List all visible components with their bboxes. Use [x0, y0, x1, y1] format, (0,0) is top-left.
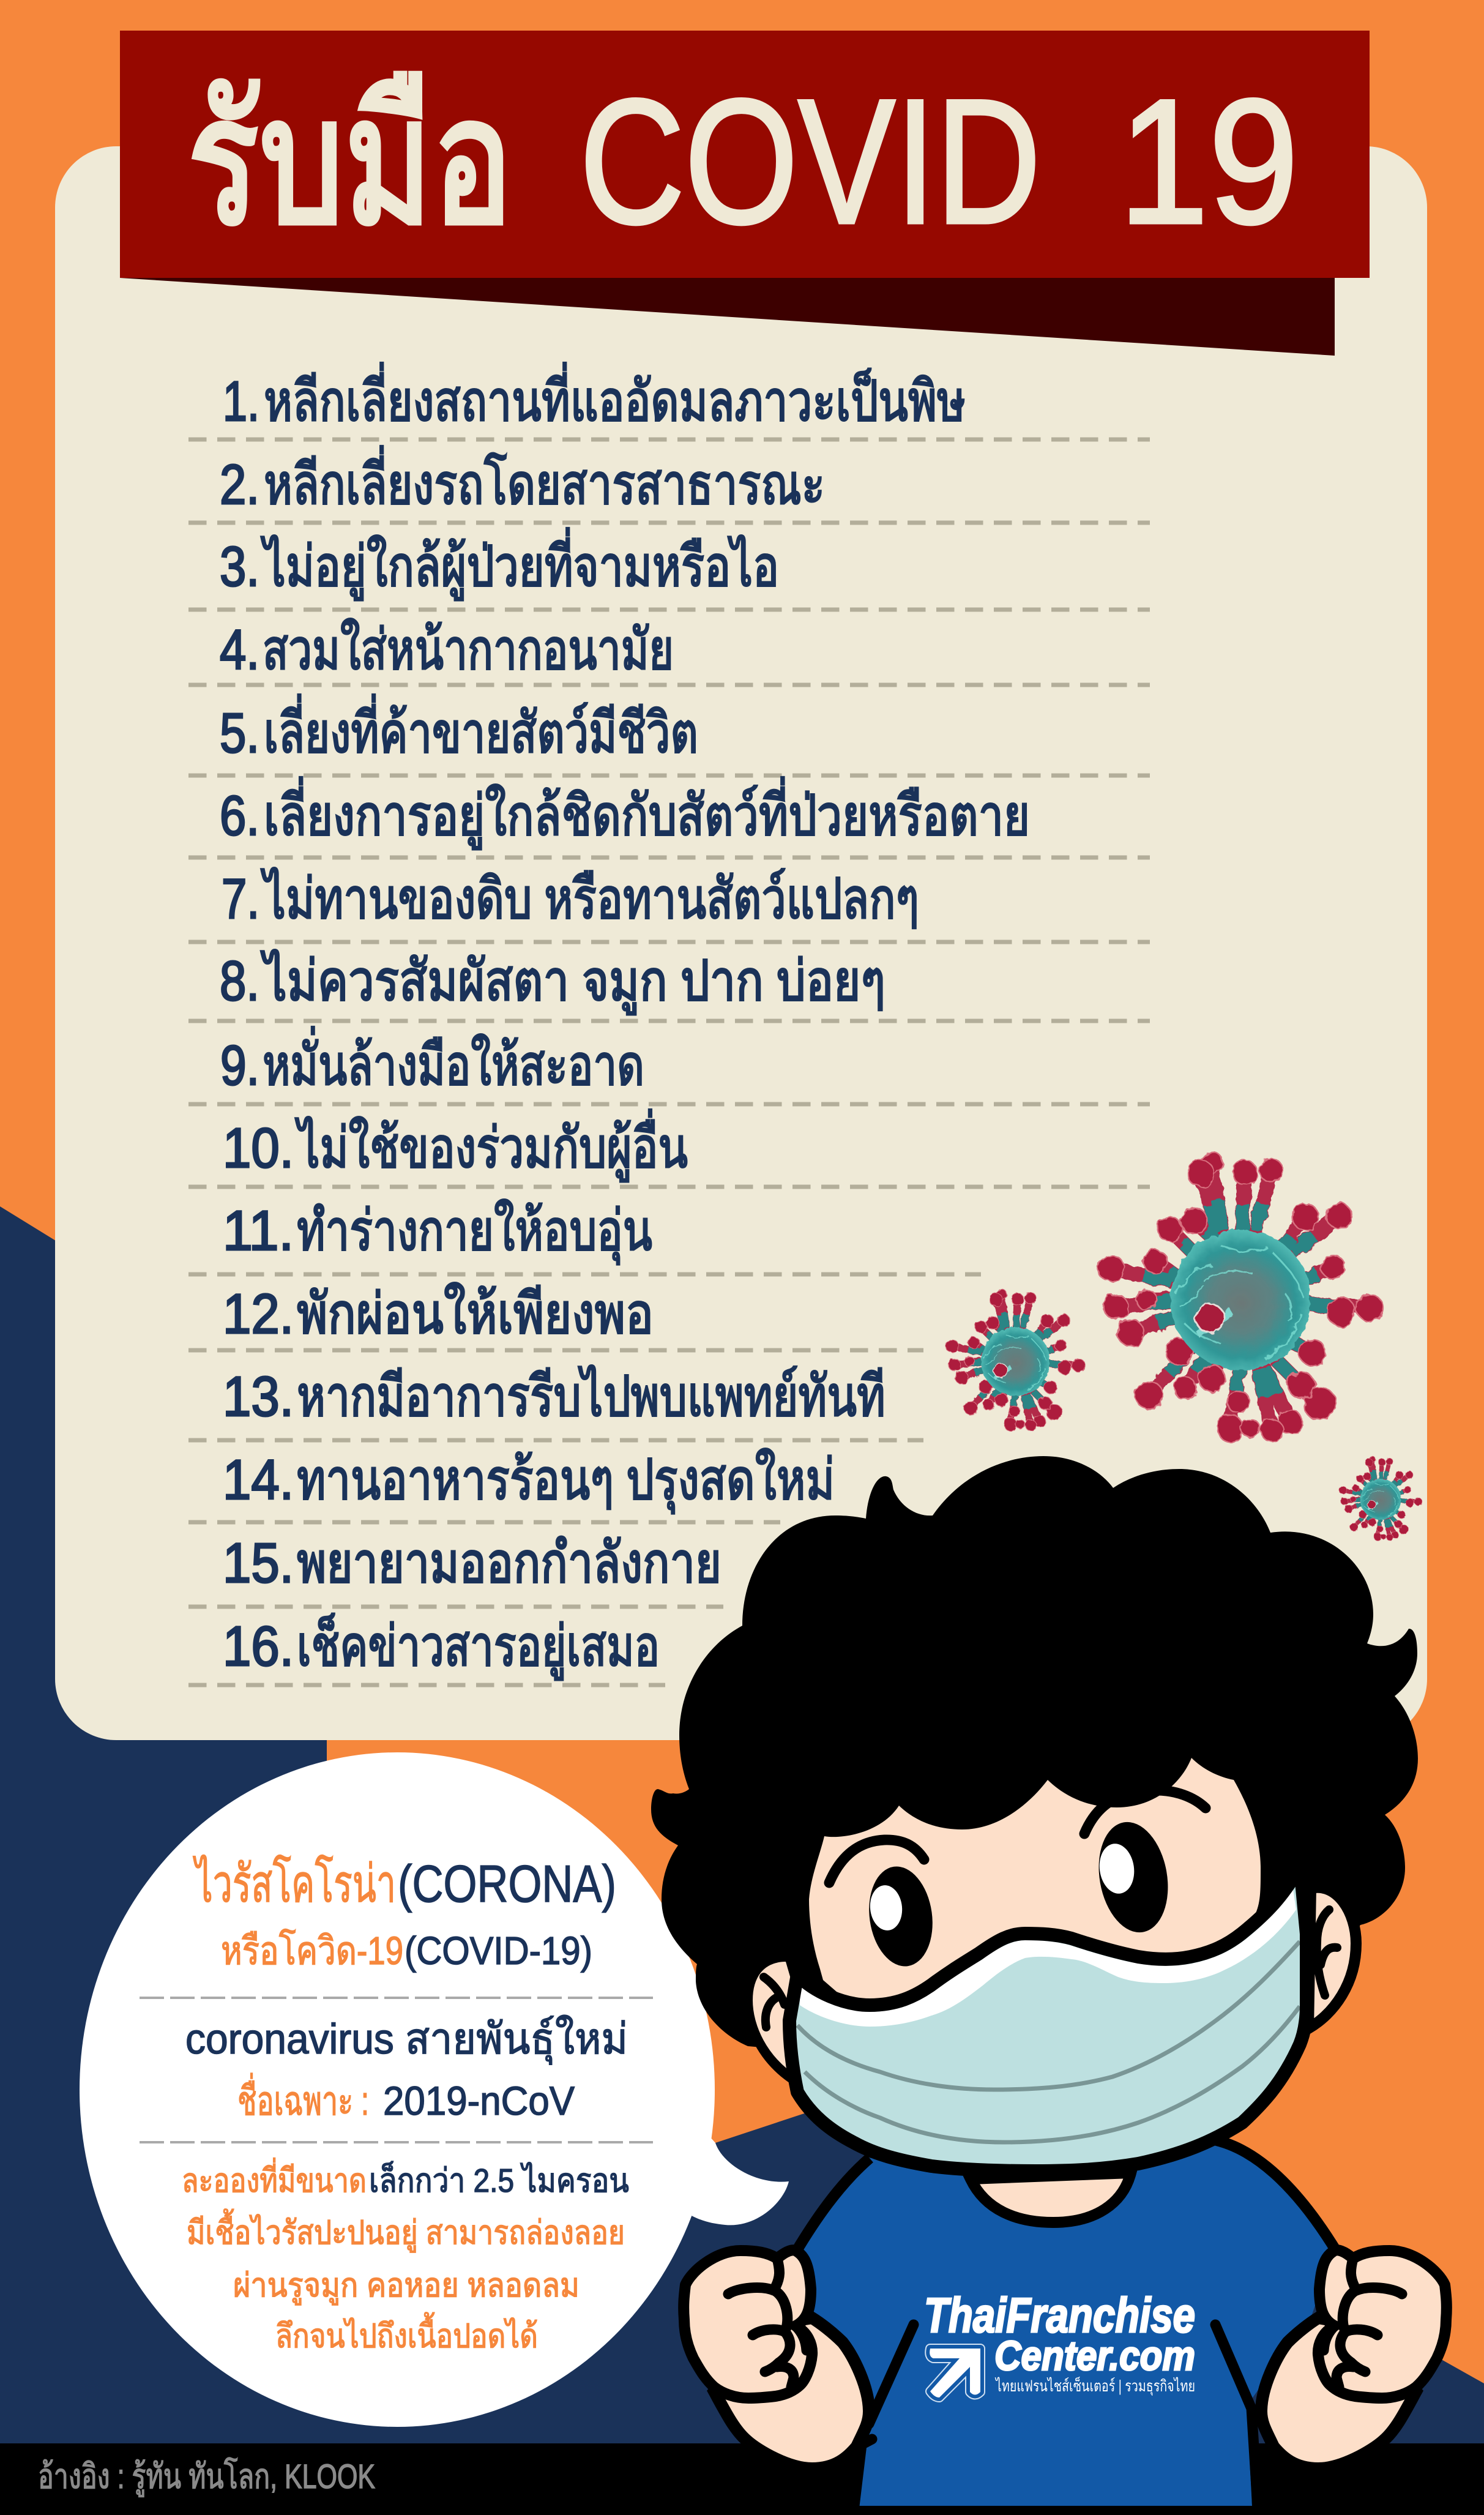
left eye	[863, 1863, 939, 1970]
tip 13: 13.	[223, 1366, 294, 1428]
tip 2: 2.	[220, 454, 259, 516]
tip 10	[223, 1109, 688, 1182]
tip 12: พักผ่อนให้เพียงพอ	[297, 1283, 654, 1345]
eyebrows	[829, 1790, 1206, 1883]
bubble subheading: covid-19	[221, 1929, 592, 1973]
tip 6	[220, 777, 1030, 850]
list of 16 prevention tips	[188, 362, 1150, 1685]
tip 11	[223, 1200, 652, 1265]
tip 12: 12.	[223, 1283, 294, 1345]
tip 6: เลี่ยงการอยู่ใกล้ชิดกับสัตว์ที่ป่วยหรือตาย	[264, 777, 1030, 850]
tip 5: 5.	[220, 702, 259, 764]
logo text: Center.com: Center.com	[994, 2333, 1195, 2379]
tip 10: 10.	[223, 1117, 294, 1179]
tip 1: หลีกเลี่ยงสถานที่แออัดมลภาวะเป็นพิษ	[264, 362, 966, 433]
tip 3: 3.	[220, 536, 259, 598]
bubble text: new strain: coronavirus สายพันธุ์ใหม่	[185, 2014, 628, 2065]
title text	[187, 62, 1299, 261]
tip 9: 9.	[220, 1034, 259, 1097]
bubble text: specific name: 2019-nCoV	[383, 2078, 575, 2123]
icon: small virus	[1339, 1456, 1422, 1541]
icon: medium virus	[945, 1289, 1085, 1430]
surgical mask	[789, 1876, 1307, 2171]
character wearing mask	[651, 1456, 1447, 2506]
shirt	[796, 2139, 1337, 2506]
bubble text: specific name: ชื่อเฉพาะ :	[237, 2073, 369, 2123]
tip 4: สวมใส่หน้ากากอนามัย	[263, 619, 674, 681]
bubble paragraph: ผ่านรูจมูก คอหอย หลอดลม	[233, 2267, 580, 2305]
tip 2	[220, 446, 825, 516]
tip 9	[220, 1026, 644, 1097]
bubble paragraph: ลึกจนไปถึงเนื้อปอดได้	[275, 2312, 538, 2355]
bubble paragraph	[182, 2158, 629, 2355]
bubble heading: corona: (CORONA)	[398, 1855, 616, 1913]
right arm and fist	[1261, 2250, 1447, 2468]
tip 4	[220, 619, 674, 681]
bubble text: specific name	[237, 2073, 575, 2123]
tip 16: เช็คข่าวสารอยู่เสมอ	[297, 1613, 660, 1680]
hair	[651, 1456, 1418, 2050]
tip 16	[223, 1613, 660, 1680]
ribbon shadow	[120, 278, 1335, 356]
speech bubble	[80, 1752, 789, 2427]
footer source credit: อ้างอิง : รู้ทัน ทันโลก, KLOOK	[38, 2457, 375, 2497]
bubble paragraph: เล็กกว่า 2.5 ไมครอน	[369, 2161, 629, 2199]
tip 7: ไม่ทานของดิบ หรือทานสัตว์แปลกๆ	[261, 868, 919, 930]
tip 1	[223, 362, 966, 433]
tip 4: 4.	[220, 619, 259, 681]
bubble subheading: covid-19: (COVID-19)	[405, 1929, 592, 1973]
tip 9: หมั่นล้างมือให้สะอาด	[263, 1026, 644, 1097]
bubble paragraph: มีเชื้อไวรัสปะปนอยู่ สามารถล่องลอย	[187, 2209, 625, 2252]
tip 3: ไม่อยู่ใกล้ผู้ป่วยที่จามหรือไอ	[261, 528, 779, 600]
tip 15: 15.	[223, 1532, 294, 1594]
icon: logo arrow	[930, 2349, 980, 2397]
tip 14	[223, 1449, 835, 1514]
tip 15: พยายามออกกำลังกาย	[297, 1532, 721, 1594]
tip 14: 14.	[223, 1449, 294, 1511]
logo Thai tagline: ไทยแฟรนไชส์เซ็นเตอร์ | รวมธุรกิจไทย	[994, 2376, 1195, 2396]
tip 5: เลี่ยงที่ค้าขายสัตว์มีชีวิต	[264, 694, 698, 764]
title banner	[120, 31, 1370, 278]
title text: COVID	[580, 62, 1041, 261]
tip 11: 11.	[223, 1200, 294, 1262]
tip 13: หากมีอาการรีบไปพบแพทย์ทันที	[297, 1366, 886, 1428]
left arm and fist	[684, 2250, 869, 2468]
navy background shape	[0, 1206, 1484, 2443]
tip 11: ทำร่างกายให้อบอุ่น	[297, 1200, 652, 1265]
tip 3	[220, 528, 779, 600]
tip 7: 7.	[222, 868, 259, 930]
mask white nose strip	[800, 1885, 1296, 2027]
bubble heading: corona: ไวรัสโคโรน่า	[193, 1855, 396, 1913]
icon: large virus	[1097, 1152, 1383, 1441]
logo text: ThaiFranchise: ThaiFranchise	[924, 2288, 1195, 2342]
bubble paragraph: ละอองที่มีขนาด	[182, 2158, 367, 2199]
title text: รับมือ	[187, 62, 513, 261]
tip 16: 16.	[223, 1615, 294, 1678]
bubble subheading: covid-19: หรือโควิด-19	[221, 1929, 403, 1973]
footer black bar	[0, 2443, 1484, 2515]
face	[809, 1758, 1261, 2020]
tip 14: ทานอาหารร้อนๆ ปรุงสดใหม่	[297, 1449, 835, 1514]
title text: 19	[1119, 62, 1299, 261]
right eye	[1091, 1817, 1176, 1938]
left ear	[748, 1957, 808, 2081]
mask pleats	[797, 1941, 1300, 2142]
shirt logo	[924, 2288, 1195, 2397]
neck	[971, 2173, 1131, 2222]
tip 8: ไม่ควรสัมผัสตา จมูก ปาก บ่อยๆ	[260, 950, 886, 1015]
panel: tips card	[55, 146, 1427, 1740]
tip 1: 1.	[223, 370, 259, 433]
tip 5	[220, 694, 698, 764]
right ear	[1308, 1888, 1356, 2028]
tip 6: 6.	[220, 785, 259, 847]
tip 10: ไม่ใช้ของร่วมกับผู้อื่น	[295, 1109, 688, 1182]
tip 2: หลีกเลี่ยงรถโดยสารสาธารณะ	[264, 446, 825, 516]
tip 8: 8.	[220, 950, 259, 1012]
